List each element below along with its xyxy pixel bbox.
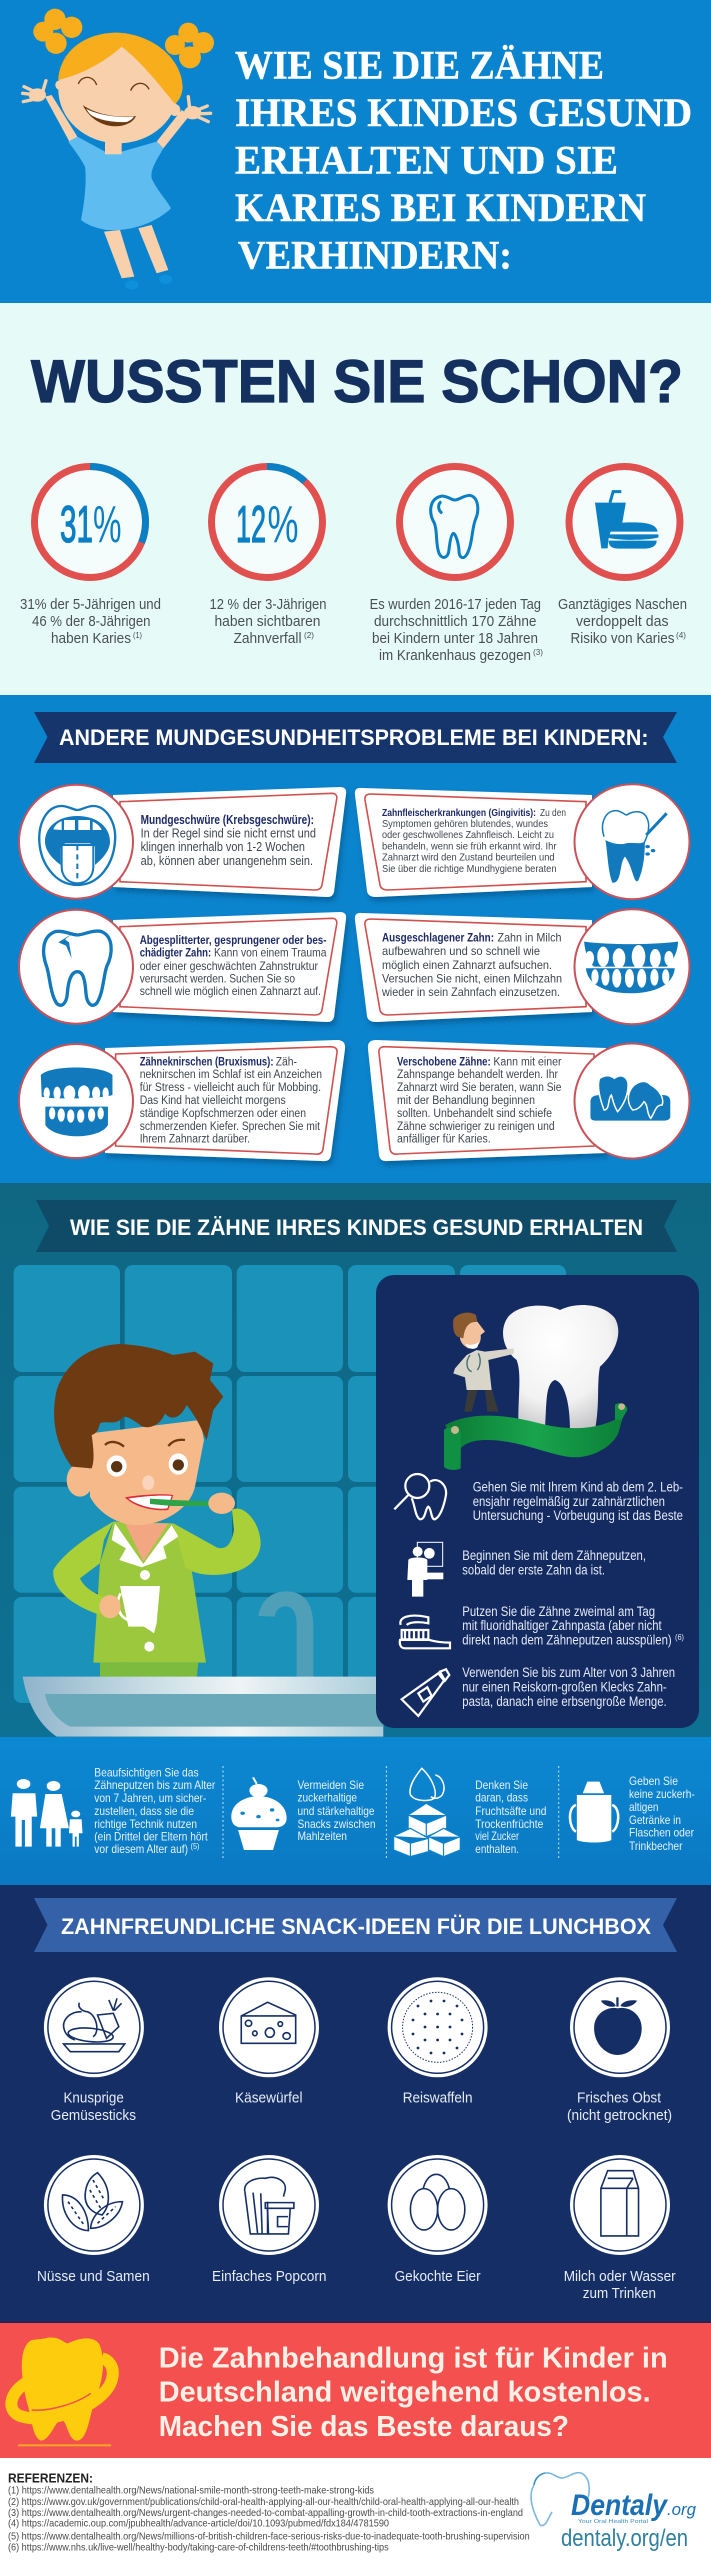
snack: rice cakes xyxy=(388,1977,488,2077)
references xyxy=(8,2470,530,2554)
card: bruxism: für Stress - vielleicht auch für Mobbing. xyxy=(140,1082,321,1094)
snack: cheese cubes xyxy=(219,1977,319,2077)
card: chipped tooth: oder einer geschwächten Zahnstruktur xyxy=(140,959,318,973)
snack label: Knusprige xyxy=(64,2091,124,2107)
panel: tips row xyxy=(0,1737,711,1885)
references: (5) https://www.dentalhealth.org/News/millions-of-british-children-face-serious-risks-due-to-inadequate-tooth-brushing-supervision xyxy=(8,2530,530,2542)
icon: yellow tooth xyxy=(11,2338,113,2446)
card: bruxism: Das Kind hat vielleicht morgens xyxy=(140,1095,286,1107)
icon: mouth and tongue xyxy=(39,806,115,885)
card: mouth ulcers: Mundgeschwüre (Krebsgeschwüre): xyxy=(141,813,314,827)
tip: supervise brushing: Beaufsichtigen Sie das xyxy=(94,1766,199,1780)
snack label xyxy=(51,2091,672,2124)
title: IHRES KINDES GESUND xyxy=(235,90,692,135)
panel: other oral health problems xyxy=(0,695,711,1183)
logo: Dentaly.org: .org xyxy=(667,2500,697,2519)
tip: toothpaste amount: pasta, danach eine erbsengroße Menge. xyxy=(462,1694,667,1709)
icon: fruit and sugar cubes xyxy=(394,1768,460,1857)
tip: hidden sugar in fruit juice: daran, dass xyxy=(475,1791,528,1805)
panel: wussten sie schon xyxy=(0,303,711,695)
tip: toothpaste amount xyxy=(402,1665,675,1716)
icon: drink and burger xyxy=(595,492,658,549)
logo: Dentaly.org xyxy=(531,2473,697,2552)
card: chipped tooth xyxy=(19,910,346,1024)
callout text: Die Zahnbehandlung ist für Kinder in xyxy=(159,2342,668,2374)
stat: tooth extractions: (3) xyxy=(533,648,543,657)
card: bruxism: schmerzenden Kiefer. Sprechen Sie mit xyxy=(140,1121,321,1133)
card: mouth ulcers: In der Regel sind sie nicht ernst und xyxy=(141,827,316,841)
icon: milk carton xyxy=(601,2171,639,2236)
icon: family xyxy=(11,1779,83,1847)
stat: 12 percent: Zahnverfall xyxy=(234,630,302,647)
tip: hidden sugar in fruit juice xyxy=(394,1768,546,1857)
tip: avoid sugary snacks: Vermeiden Sie xyxy=(298,1778,364,1792)
snack label: (nicht getrocknet) xyxy=(567,2108,672,2124)
card: knocked-out tooth: Versuchen Sie nicht, einen Milchzahn xyxy=(382,972,562,986)
snack label: zum Trinken xyxy=(583,2286,656,2302)
tip: hidden sugar in fruit juice: Fruchtsäfte und xyxy=(475,1804,546,1818)
tip: toothpaste amount: nur einen Reiskorn-großen Klecks Zahn- xyxy=(462,1680,667,1695)
icon: toothbrush xyxy=(400,1616,450,1648)
tip: dental check-ups: ensjahr regelmäßig zur zahnärztlichen xyxy=(473,1494,665,1509)
stat: snacking: verdoppelt das xyxy=(576,613,668,630)
tip: supervise brushing xyxy=(11,1766,215,1856)
snack label: Einfaches Popcorn xyxy=(212,2269,326,2285)
icon: fruit xyxy=(594,1997,642,2055)
stat: 31 percent xyxy=(20,466,161,647)
stat: 31 percent: haben Karies xyxy=(51,630,131,647)
title xyxy=(235,42,692,278)
card: gingivitis: Sie über die richtige Mundhygiene beraten xyxy=(382,863,557,875)
title: ERHALTEN UND SIE xyxy=(235,138,618,182)
icon: clenched teeth xyxy=(41,1067,112,1136)
card: gingivitis xyxy=(355,784,690,899)
illustration: boy brushing teeth xyxy=(23,1344,383,1737)
stat: 12 percent: 12 % der 3-Jährigen xyxy=(210,596,326,613)
card: chipped tooth: schnell wie möglich einen Zahnarzt auf. xyxy=(140,984,321,998)
card: knocked-out tooth xyxy=(355,909,690,1024)
stat: snacking xyxy=(558,466,687,647)
panel: how to keep teeth healthy xyxy=(0,1183,711,1737)
card: crooked teeth: sollten. Unbehandelt sind schiefe xyxy=(397,1108,552,1120)
tip: no sugary drinks: keine zuckerh- xyxy=(629,1787,695,1801)
card: bruxism: Zähneknirschen (Bruxismus): xyxy=(140,1057,274,1069)
stat: snacking: Ganztägiges Naschen xyxy=(558,596,687,613)
snack: popcorn xyxy=(219,2155,319,2255)
stat: tooth extractions: durchschnittlich 170 Zähne xyxy=(374,613,536,630)
title: KARIES BEI KINDERN xyxy=(235,185,646,230)
card: mouth ulcers: ab, können aber unangenehm sein. xyxy=(141,854,313,868)
tip: no sugary drinks: Geben Sie xyxy=(629,1774,678,1788)
icon: tooth with gum disease xyxy=(603,811,667,883)
panel: footer xyxy=(0,2458,711,2560)
tip: avoid sugary snacks: zuckerhaltige xyxy=(298,1791,357,1805)
card: chipped tooth: verursacht werden. Suchen Sie so xyxy=(140,972,295,986)
tip: no sugary drinks: altigen xyxy=(629,1800,658,1814)
tip: avoid sugary snacks xyxy=(231,1777,376,1850)
callout text: Deutschland weitgehend kostenlos. xyxy=(159,2377,651,2409)
card: chipped tooth: chädigter Zahn: xyxy=(140,946,211,960)
tip: supervise brushing: von 7 Jahren, um sicher- xyxy=(94,1791,206,1805)
tip: avoid sugary snacks: Snacks zwischen xyxy=(298,1817,376,1831)
icon: tooth xyxy=(431,495,478,558)
icon: cupcake xyxy=(231,1777,287,1850)
card: chipped tooth: Abgesplitterter, gesprungener oder bes- xyxy=(140,933,326,947)
card: mouth ulcers: klingen innerhalb von 1-2 Wochen xyxy=(141,840,305,854)
icon: cracked tooth xyxy=(44,931,111,1005)
tip: supervise brushing: (ein Drittel der Eltern hört xyxy=(94,1830,208,1844)
icon: magnifier and tooth xyxy=(394,1474,446,1519)
card: crooked teeth: Zahnarzt wird Sie beraten, wann Sie xyxy=(397,1082,562,1094)
tip: supervise brushing: vor diesem Alter auf) xyxy=(94,1842,188,1856)
banner heading: ZAHNFREUNDLICHE SNACK-IDEEN FÜR DIE LUNCHBOX xyxy=(61,1914,651,1939)
tip: start brushing: Beginnen Sie mit dem Zähneputzen, xyxy=(462,1548,646,1563)
callout text xyxy=(159,2342,668,2443)
icon: crooked teeth xyxy=(590,1076,670,1121)
title: VERHINDERN: xyxy=(238,232,512,278)
panel: dark tips card xyxy=(376,1275,699,1728)
card: bruxism: Ihrem Zahnarzt darüber. xyxy=(140,1134,250,1146)
icon: person at mirror xyxy=(407,1542,443,1597)
card: crooked teeth: Verschobene Zähne: xyxy=(397,1057,491,1069)
illustration: happy girl xyxy=(23,9,214,290)
tip: hidden sugar in fruit juice: enthalten. xyxy=(475,1842,519,1856)
tip: brush twice a day: direkt nach dem Zähneputzen ausspülen) xyxy=(462,1632,672,1647)
callout text: Machen Sie das Beste daraus? xyxy=(159,2411,569,2443)
icon: toothpaste tube xyxy=(402,1669,449,1716)
stat: 31 percent: (1) xyxy=(133,631,142,640)
icon: rice cake xyxy=(403,1992,473,2062)
tip: brush twice a day: mit fluoridhaltiger Zahnpasta (aber nicht xyxy=(462,1618,662,1633)
stat: tooth extractions: im Krankenhaus gezogen xyxy=(379,647,531,664)
card: knocked-out tooth: wieder in sein Zahnfach einzusetzen. xyxy=(381,985,560,999)
logo: Dentaly.org: Dentaly xyxy=(571,2489,668,2522)
tip: brush twice a day: (6) xyxy=(675,1633,684,1642)
references: (6) https://www.nhs.uk/live-well/healthy-body/taking-care-of-childrens-teeth/#toothbrushing-tips xyxy=(8,2542,389,2554)
snack label: Nüsse und Samen xyxy=(37,2269,150,2285)
card: knocked-out tooth: Ausgeschlagener Zahn: xyxy=(382,931,494,945)
stat: 12 percent: % xyxy=(268,496,298,554)
card: gingivitis: Zu den xyxy=(540,807,566,819)
panel: callout xyxy=(0,2321,711,2458)
tip: supervise brushing: zustellen, dass sie die xyxy=(94,1804,194,1818)
icon: almonds xyxy=(62,2173,122,2231)
tip: dental check-ups xyxy=(394,1474,683,1523)
card: crooked teeth: mit der Behandlung beginnen xyxy=(397,1095,535,1107)
banner heading xyxy=(34,712,677,763)
stat: tooth extractions xyxy=(370,466,543,664)
stat: tooth extractions: bei Kindern unter 18 Jahren xyxy=(372,630,538,647)
stat: 12 percent: haben sichtbaren xyxy=(214,613,320,630)
snack label: Frisches Obst xyxy=(577,2091,661,2107)
card: crooked teeth: Zähne schwieriger zu reinigen und xyxy=(397,1121,555,1133)
snack label: Käsewürfel xyxy=(235,2091,302,2107)
stat: 31 percent: % xyxy=(93,496,122,554)
stat: snacking: (4) xyxy=(676,631,686,640)
snack label: Gekochte Eier xyxy=(395,2269,481,2285)
stat: 12 percent: 12 xyxy=(236,496,266,554)
card: bruxism: Zäh- xyxy=(276,1057,297,1069)
references: REFERENZEN: xyxy=(8,2470,93,2485)
card: mouth ulcers xyxy=(19,785,346,899)
bathroom tiles background xyxy=(14,1265,566,1703)
card: knocked-out tooth: Zahn in Milch xyxy=(498,931,562,945)
snack: milk or water xyxy=(570,2155,670,2255)
snack: boiled eggs xyxy=(388,2155,488,2255)
card: chipped tooth: Kann von einem Trauma xyxy=(214,946,327,960)
card: knocked-out tooth: möglich einen Zahnarzt aufsuchen. xyxy=(382,958,552,972)
card: bruxism xyxy=(19,1040,345,1161)
card: crooked teeth: anfälliger für Karies. xyxy=(397,1134,491,1146)
tip: no sugary drinks xyxy=(570,1774,695,1853)
banner heading xyxy=(36,1200,677,1252)
stat: tooth extractions: Es wurden 2016-17 jeden Tag xyxy=(370,596,541,613)
heading: WUSSTEN SIE SCHON? xyxy=(31,348,683,415)
card: knocked-out tooth: aufbewahren und so schnell wie xyxy=(382,944,540,958)
snack: vegetable sticks xyxy=(44,1977,144,2077)
card: crooked teeth: Zahnspange behandelt werden. Ihr xyxy=(397,1069,558,1081)
banner heading: WIE SIE DIE ZÄHNE IHRES KINDES GESUND ERHALTEN xyxy=(70,1215,643,1240)
stat: 12 percent: (2) xyxy=(304,631,314,640)
snack: fresh fruit xyxy=(570,1977,670,2077)
tip: no sugary drinks: Getränke in xyxy=(629,1813,681,1827)
banner heading xyxy=(34,1898,677,1952)
tip: hidden sugar in fruit juice: Trockenfrüchte xyxy=(475,1817,544,1831)
snack: nuts and seeds xyxy=(44,2155,144,2255)
card: gingivitis: behandeln, wenn sie früh erkannt wird. Ihr xyxy=(382,840,557,852)
tip: avoid sugary snacks: Mahlzeiten xyxy=(298,1829,347,1843)
icon: cheese xyxy=(241,2002,296,2043)
logo: Dentaly.org: Your Oral Health Portal xyxy=(578,2519,648,2525)
card: crooked teeth: Kann mit einer xyxy=(493,1057,562,1069)
stat: 12 percent xyxy=(210,466,326,647)
tip: supervise brushing: Zähneputzen bis zum Alter xyxy=(94,1778,215,1792)
tip: brush twice a day xyxy=(400,1604,684,1648)
tip: hidden sugar in fruit juice: Denken Sie xyxy=(475,1778,528,1792)
icon: popcorn and drink xyxy=(245,2177,294,2234)
tip: start brushing: sobald der erste Zahn da ist. xyxy=(462,1563,605,1578)
card: gingivitis: Symptomen gehören blutendes, wundes xyxy=(382,818,548,830)
snack label: Reiswaffeln xyxy=(403,2091,472,2107)
card: gingivitis: oder geschwollenes Zahnfleisch. Leicht zu xyxy=(382,829,554,841)
logo: Dentaly.org: dentaly.org/en xyxy=(561,2525,688,2552)
panel: header xyxy=(0,0,711,303)
card: gingivitis: Zahnfleischerkrankungen (Gingivitis): xyxy=(382,807,536,819)
panel: snack ideas xyxy=(0,1885,711,2323)
stat: snacking: Risiko von Karies xyxy=(570,630,674,647)
stat: 31 percent: 46 % der 8-Jährigen xyxy=(32,613,150,630)
card: bruxism: ständige Kopfschmerzen oder einen xyxy=(140,1108,306,1120)
illustration: dentist and tooth xyxy=(444,1305,627,1470)
tip: start brushing xyxy=(407,1542,646,1597)
icon: teeth with a gap xyxy=(584,942,678,993)
stat: 31 percent: 31% der 5-Jährigen und xyxy=(20,596,161,613)
stat: 31 percent: 31 xyxy=(60,496,93,554)
tip: no sugary drinks: Flaschen oder xyxy=(629,1826,694,1840)
tip: brush twice a day: Putzen Sie die Zähne zweimal am Tag xyxy=(462,1604,655,1619)
references: (3) https://www.dentalhealth.org/News/urgent-changes-needed-to-combat-appalling-growth-in-child-tooth-extractions-in-england xyxy=(8,2507,523,2519)
banner heading: ANDERE MUNDGESUNDHEITSPROBLEME BEI KINDERN: xyxy=(59,725,648,750)
title: WIE SIE DIE ZÄHNE xyxy=(235,42,604,88)
references: (2) https://www.gov.uk/government/publications/child-oral-health-applying-all-our-health/child-oral-health-applying-all-our-health xyxy=(8,2496,519,2508)
tip: hidden sugar in fruit juice: viel Zucker xyxy=(475,1829,519,1843)
icon: sippy cup xyxy=(570,1782,618,1842)
references: (1) https://www.dentalhealth.org/News/national-smile-month-strong-teeth-make-strong-kids xyxy=(8,2484,374,2496)
card: bruxism: neknirschen im Schlaf ist ein Anzeichen xyxy=(140,1069,322,1081)
tip: no sugary drinks: Trinkbecher xyxy=(629,1839,682,1853)
references: (4) https://academic.oup.com/jpubhealth/advance-article/doi/10.1093/pubmed/fdx184/4781590 xyxy=(8,2518,389,2530)
snack label: Milch oder Wasser xyxy=(564,2269,676,2285)
icon: eggs xyxy=(410,2174,465,2230)
card: gingivitis: Zahnarzt wird den Zustand beurteilen und xyxy=(382,852,555,864)
snack label: Gemüsesticks xyxy=(51,2108,136,2124)
icon: vegetables xyxy=(63,1998,125,2052)
tip: supervise brushing: richtige Technik nutzen xyxy=(94,1817,197,1831)
tip: avoid sugary snacks: und stärkehaltige xyxy=(298,1804,375,1818)
tip: toothpaste amount: Verwenden Sie bis zum Alter von 3 Jahren xyxy=(462,1665,675,1680)
tip: supervise brushing: (5) xyxy=(190,1842,200,1851)
snack label xyxy=(37,2269,676,2302)
card: crooked teeth xyxy=(368,1040,690,1161)
